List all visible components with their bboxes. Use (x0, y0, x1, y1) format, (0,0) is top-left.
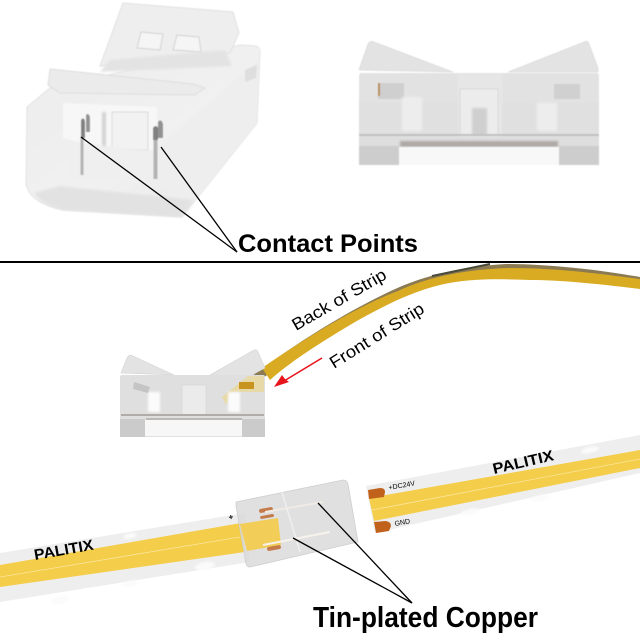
clip window slots (137, 32, 201, 52)
raised top clip (100, 3, 239, 66)
white pillar right (228, 392, 240, 412)
bottom side shades (120, 419, 145, 437)
voltage label: +DC24V (388, 480, 416, 492)
copper pads under housing (259, 507, 281, 551)
connector body (26, 45, 260, 217)
horizontal divider (0, 261, 640, 263)
yellow led band (369, 450, 640, 521)
underside lip (34, 186, 194, 217)
heading: tin-plated copper: Tin-plated Copper (313, 602, 538, 634)
white bubbles (460, 445, 599, 517)
strip base (366, 435, 640, 533)
strip seen through body (222, 376, 264, 405)
left wing (359, 41, 453, 72)
tin pin bottom (263, 532, 330, 545)
label: front of strip: Front of Strip (326, 299, 428, 372)
right wing (210, 350, 265, 376)
lower highlight (359, 103, 599, 135)
center window (458, 75, 502, 137)
panel: angled connector photo (26, 3, 260, 217)
contact point leader lines (81, 137, 237, 252)
arrow: red pointing to connector (274, 358, 322, 387)
housing (236, 480, 358, 567)
right side face (155, 60, 258, 217)
metal contact pin left (80, 114, 90, 175)
tin-plated copper leader lines (293, 503, 412, 603)
white bottom bar (145, 420, 242, 436)
front clip bar (48, 69, 205, 95)
brand text: PALITIX (33, 537, 95, 564)
side notch (245, 65, 257, 82)
copper pad top (368, 488, 385, 499)
white bottom bar (399, 147, 559, 165)
voltage label: + (228, 512, 234, 522)
left slot hatch (133, 382, 150, 393)
panel: strip inserted into connector (120, 264, 640, 437)
led highlight line (0, 537, 240, 577)
label: back of strip: Back of Strip (288, 265, 390, 334)
right wing (508, 41, 598, 72)
body (359, 73, 599, 165)
yellow pad (239, 382, 254, 389)
textured line (121, 414, 264, 416)
white pillar left (148, 392, 160, 412)
clip texture (100, 50, 232, 72)
back of strip (248, 264, 640, 382)
right slot (554, 84, 580, 99)
body (120, 375, 265, 437)
panel: joined connector (236, 480, 358, 567)
panel: right led strip (366, 435, 640, 533)
inner window (63, 103, 157, 150)
inner housing seam (282, 492, 300, 552)
panel: left led strip (0, 512, 250, 606)
left slot (378, 83, 404, 99)
center window (182, 385, 206, 415)
strip yellow front (262, 268, 640, 380)
strip yellow through housing (240, 518, 281, 551)
lower inner floor (68, 142, 160, 180)
bottom side shades (359, 146, 399, 165)
panel: front view connector photo (359, 41, 599, 165)
tin pin top (265, 502, 323, 512)
metal contact pin right (153, 120, 163, 179)
copper pad bottom (374, 521, 391, 533)
left pillar (402, 97, 422, 131)
white bubbles (50, 532, 216, 606)
left wing (121, 355, 174, 375)
right pillar (537, 103, 557, 131)
gnd label: GND (394, 518, 411, 528)
yellow led band (0, 523, 245, 587)
textured lines (359, 134, 599, 136)
strip print (432, 264, 490, 276)
upper body band (359, 73, 599, 103)
heading: contact points: Contact Points (238, 230, 418, 258)
strip base (0, 513, 250, 602)
led highlight line (372, 459, 640, 510)
brand text: PALITIX (491, 447, 555, 478)
